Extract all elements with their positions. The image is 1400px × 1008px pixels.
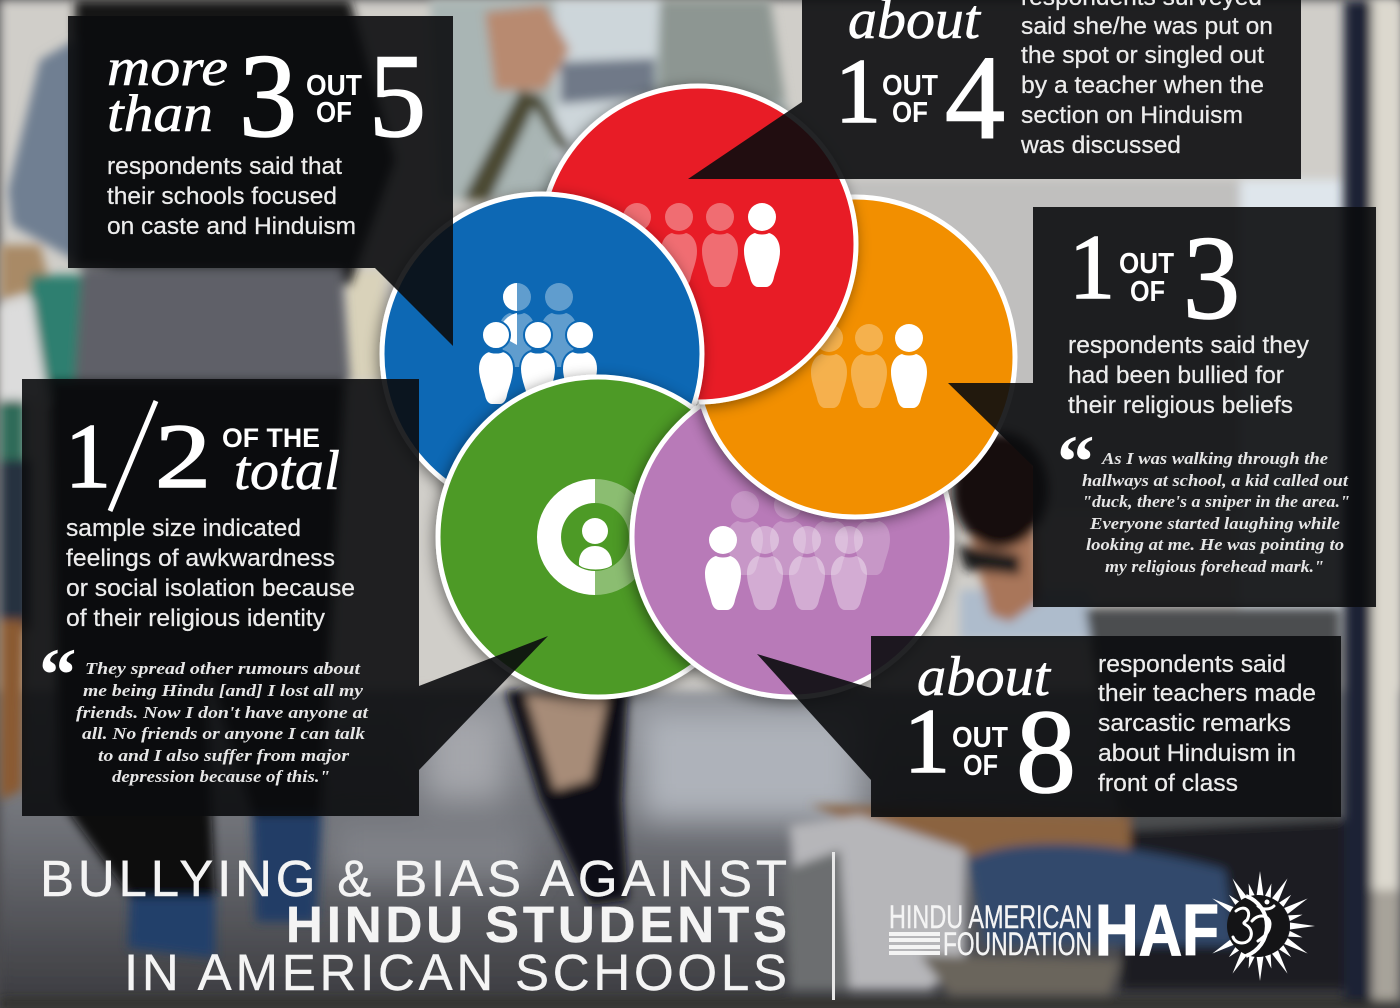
stat heading: about 1 out of 8 bbox=[904, 646, 1076, 818]
quote: rumours bbox=[39, 634, 369, 786]
text: caste and Hinduism finding: respondents said that bbox=[107, 153, 342, 180]
lockers and wall bbox=[1344, 0, 1372, 1008]
stat heading: more than 3 out of 5: OUT bbox=[306, 70, 362, 102]
stat heading: about 1 out of 4: OUT bbox=[882, 70, 938, 102]
stat heading: more than 3 out of 5: 3 bbox=[239, 29, 297, 162]
left student bbox=[8, 40, 75, 260]
quote: sniper remark: “ bbox=[1057, 421, 1094, 504]
stat heading: about 1 out of 4: 1 bbox=[835, 40, 881, 142]
stat heading: 1/2 of the total bbox=[65, 401, 340, 511]
quote: rumours: to and I also suffer from major bbox=[98, 746, 349, 765]
circle: purple, sarcastic remarks bbox=[620, 396, 962, 710]
stat heading: about 1 out of 8: OF bbox=[963, 750, 998, 782]
icon: 1 of 4 people bbox=[619, 203, 780, 287]
stat heading: about 1 out of 4 bbox=[835, 0, 1005, 164]
panel: 1 out of 3 bbox=[948, 207, 1376, 607]
stat heading: 1/2 of the total: 2 bbox=[155, 405, 211, 507]
stat heading: more than 3 out of 5: OF bbox=[316, 97, 352, 129]
text: sarcastic remarks finding bbox=[1098, 651, 1316, 797]
text: sarcastic remarks finding: their teachers made bbox=[1098, 680, 1316, 707]
text: put on the spot finding: said she/he was put on bbox=[1021, 13, 1273, 40]
icon: 1 of 3 people bbox=[811, 324, 927, 408]
logo: Hindu American Foundation: HAF bbox=[1095, 891, 1219, 971]
stat heading: 1 out of 3: OF bbox=[1130, 276, 1165, 308]
logo: Hindu American Foundation: FOUNDATION bbox=[943, 926, 1092, 962]
stat heading: about 1 out of 8: 1 bbox=[904, 690, 950, 792]
stat heading: about 1 out of 4: 4 bbox=[945, 31, 1005, 164]
panel: about 1 out of 8 bbox=[757, 636, 1341, 818]
text: sarcastic remarks finding: sarcastic remarks bbox=[1098, 710, 1291, 737]
stat heading: about 1 out of 8: about bbox=[917, 646, 1051, 708]
left bystander bbox=[0, 245, 50, 300]
title: IN AMERICAN SCHOOLS bbox=[124, 944, 787, 1001]
stat heading: more than 3 out of 5 bbox=[107, 29, 426, 162]
icon: half donut with person bbox=[537, 479, 635, 595]
stat heading: 1 out of 3: 1 bbox=[1069, 216, 1115, 318]
text: isolation finding: or social isolation because bbox=[66, 575, 355, 602]
text: sarcastic remarks finding: front of class bbox=[1098, 770, 1238, 797]
text: put on the spot finding: by a teacher when the bbox=[1021, 72, 1264, 99]
quote: rumours: all. No friends or anyone I can talk bbox=[82, 724, 366, 743]
stat heading: about 1 out of 8: OUT bbox=[952, 722, 1008, 754]
text: caste and Hinduism finding: on caste and Hinduism bbox=[107, 213, 356, 240]
panel: 1/2 of the total bbox=[22, 379, 548, 816]
stat heading: about 1 out of 8: 8 bbox=[1016, 685, 1076, 818]
text: put on the spot finding bbox=[1020, 0, 1273, 159]
stat heading: 1 out of 3: OUT bbox=[1119, 248, 1174, 280]
text: isolation finding: sample size indicated bbox=[66, 515, 301, 542]
text: bullied finding: had been bullied for bbox=[1068, 362, 1284, 389]
quote: rumours: depression because of this." bbox=[112, 767, 330, 786]
text: bullied finding bbox=[1068, 332, 1309, 419]
text: sarcastic remarks finding: respondents said bbox=[1098, 651, 1286, 678]
stat heading: 1/2 of the total: OF THE bbox=[222, 423, 320, 453]
stat heading: 1/2 of the total: total bbox=[234, 440, 340, 502]
circle: orange, bullied for religious beliefs bbox=[695, 197, 1015, 517]
panel: about 1 out of 4 bbox=[688, 0, 1301, 179]
stat heading: 1/2 of the total: 1 bbox=[65, 405, 111, 507]
title: HINDU STUDENTS bbox=[286, 896, 787, 953]
quote: sniper remark: my religious forehead mark." bbox=[1105, 557, 1324, 576]
icon: 1 of 8 people bbox=[705, 491, 890, 610]
quote: rumours: “ bbox=[39, 634, 76, 717]
icon: 3 of 5 people bbox=[478, 283, 598, 405]
stat heading: more than 3 out of 5: than bbox=[107, 85, 213, 143]
stat heading: 1 out of 3: 3 bbox=[1183, 211, 1240, 344]
title bbox=[40, 850, 787, 1001]
text: put on the spot finding: was discussed bbox=[1020, 132, 1181, 159]
icon: sun with om symbol bbox=[1211, 871, 1315, 981]
middle student bbox=[430, 0, 800, 200]
logo: Hindu American Foundation bbox=[889, 871, 1315, 981]
logo: Hindu American Foundation: HINDU AMERICAN bbox=[889, 899, 1092, 935]
quote: sniper remark: As I was walking through the bbox=[1101, 449, 1328, 468]
seated student bbox=[960, 590, 1090, 640]
stat heading: 1 out of 3 bbox=[1069, 211, 1240, 344]
quote: rumours: They spread other rumours about bbox=[85, 659, 361, 678]
quote: sniper remark: looking at me. He was pointing to bbox=[1086, 535, 1344, 554]
quote: rumours: friends. Now I don't have anyone at bbox=[76, 703, 369, 722]
text: isolation finding: feelings of awkwardness bbox=[66, 545, 335, 572]
title: BULLYING & BIAS AGAINST bbox=[40, 850, 787, 907]
text: put on the spot finding: section on Hinduism bbox=[1021, 102, 1243, 129]
stat heading: more than 3 out of 5: 5 bbox=[369, 29, 426, 162]
panel: more than 3 out of 5 bbox=[68, 16, 453, 346]
quote: sniper remark: "duck, there's a sniper in the area." bbox=[1082, 492, 1350, 511]
text: isolation finding: of their religious identity bbox=[66, 605, 325, 632]
stat heading: more than 3 out of 5: more bbox=[107, 39, 228, 97]
quote: sniper remark bbox=[1057, 421, 1350, 576]
text: sarcastic remarks finding: about Hinduism in bbox=[1098, 740, 1296, 767]
text: caste and Hinduism finding: their schools focused bbox=[107, 183, 337, 210]
quote: sniper remark: hallways at school, a kid called out bbox=[1082, 471, 1349, 490]
stat heading: about 1 out of 4: OF bbox=[892, 97, 928, 129]
text: put on the spot finding: the spot or singled out bbox=[1021, 42, 1264, 69]
quote: sniper remark: Everyone started laughing while bbox=[1089, 514, 1340, 533]
circle: blue, schools focused on caste bbox=[382, 194, 702, 514]
text: bullied finding: respondents said they bbox=[1068, 332, 1309, 359]
quote: rumours: me being Hindu [and] I lost all my bbox=[83, 681, 364, 700]
text: bullied finding: their religious beliefs bbox=[1068, 392, 1293, 419]
circle: red, singled out by a teacher bbox=[540, 86, 856, 402]
circle: green, awkwardness or isolation bbox=[438, 377, 758, 697]
text: isolation finding bbox=[66, 515, 355, 632]
text: caste and Hinduism finding bbox=[107, 153, 356, 240]
